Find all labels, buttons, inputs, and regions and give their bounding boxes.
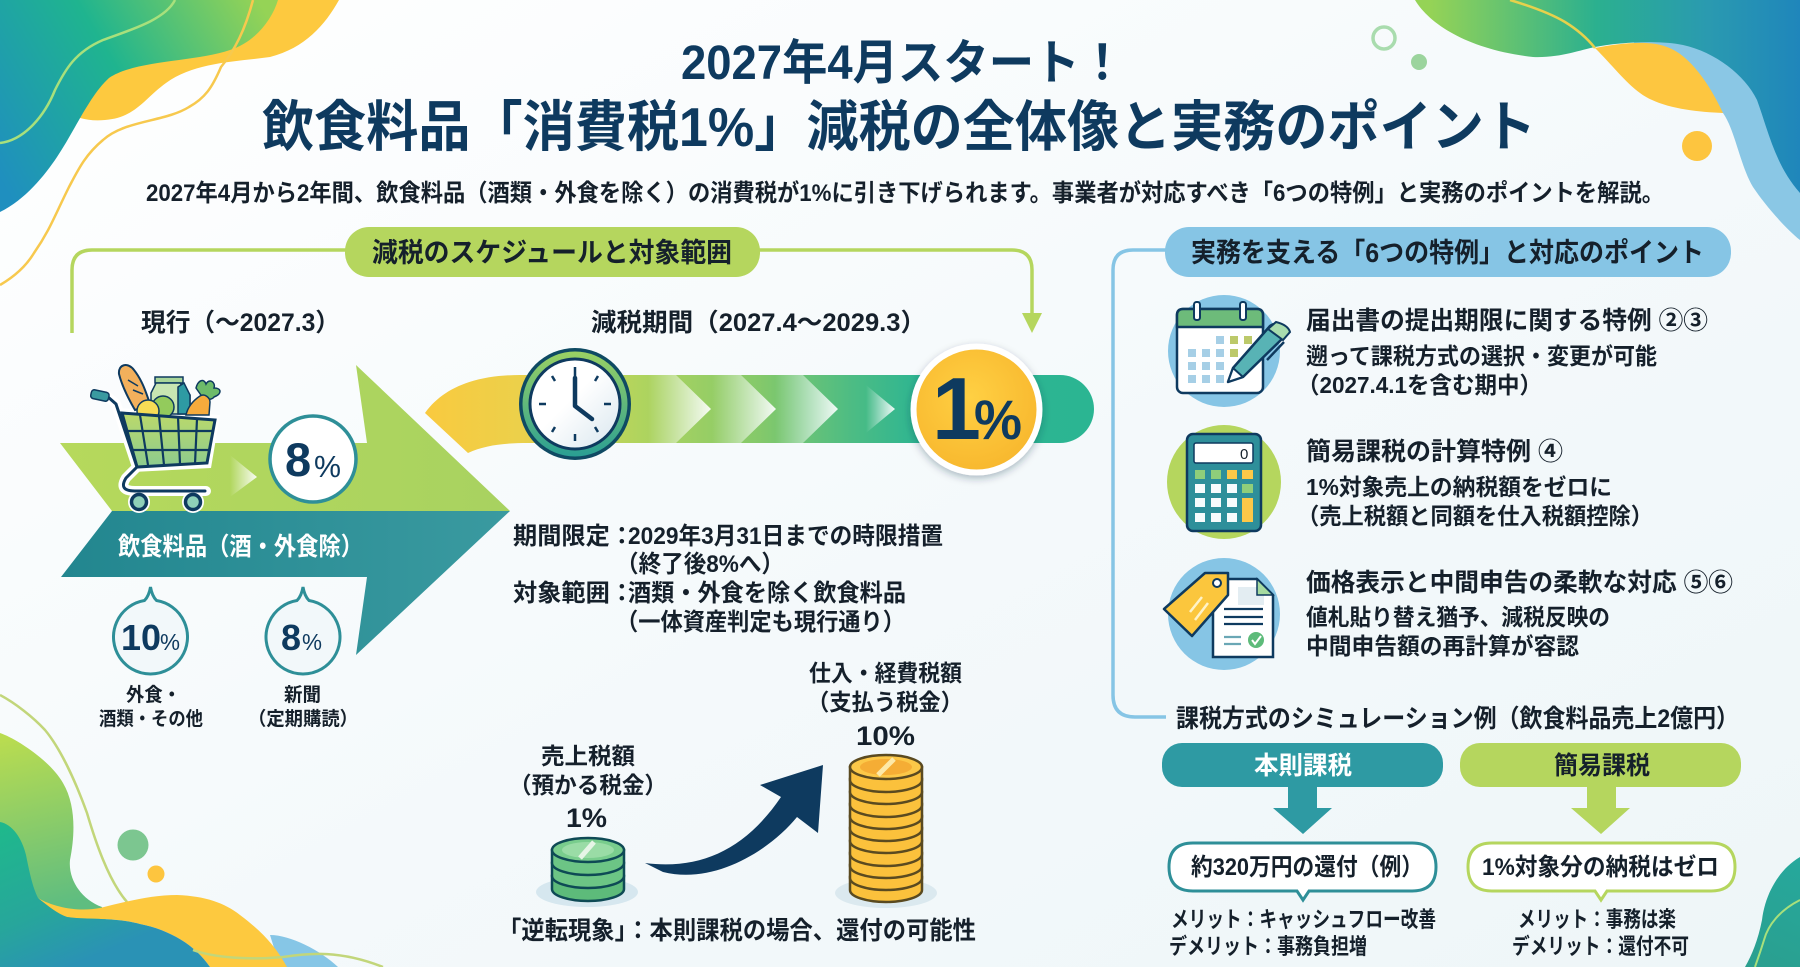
decoration: bottom-left blobs	[0, 695, 383, 967]
text: limited period and scope: 期間限定：	[513, 523, 634, 550]
label: sales tax	[509, 743, 667, 833]
label: dining out, alcohol, other	[99, 684, 203, 730]
icon: green coin stack	[536, 838, 638, 907]
text: simplified taxation: （売上税額と同額を仕入税額控除）	[1297, 503, 1653, 529]
column: standard taxation: デメリット：事務負担増	[1169, 934, 1367, 959]
badge: 8% newspapers	[266, 587, 340, 674]
small white chevron	[230, 455, 257, 497]
label: purchase tax: 仕入・経費税額	[809, 660, 962, 686]
column: standard taxation	[1162, 743, 1443, 959]
column: simplified taxation: 1%対象分の納税はゼロ	[1482, 853, 1719, 881]
decoration: top-right blobs	[1373, 0, 1800, 240]
icon: price tag and document	[1164, 558, 1280, 670]
big arrow	[60, 365, 510, 655]
icon: calendar and pen	[1168, 295, 1290, 407]
label: dining out, alcohol, other: 酒類・その他	[99, 708, 203, 730]
text: notification deadline: 遡って課税方式の選択・変更が可能	[1306, 343, 1657, 369]
caption: inversion phenomenon: 「逆転現象」：本則課税の場合、還付の可能性	[498, 917, 976, 945]
title	[262, 37, 1536, 158]
title: 飲食料品「消費税1%」減税の全体像と実務のポイント	[262, 96, 1536, 158]
column: standard taxation: 約320万円の還付（例）	[1191, 854, 1423, 881]
label: newspapers	[248, 684, 358, 730]
badge: 10%	[114, 587, 188, 674]
label: sales tax: （預かる税金）	[509, 772, 667, 798]
text: price display and interim return: 中間申告額の再計算が容認	[1306, 633, 1579, 659]
label: purchase tax: 10%	[856, 721, 915, 751]
badge: 1%: 1	[932, 359, 981, 458]
heading: six special measures	[1165, 227, 1731, 277]
badge: 8% current: 8	[285, 433, 311, 486]
title: 2027年4月スタート！	[681, 37, 1125, 90]
column: standard taxation: メリット：キャッシュフロー改善	[1171, 907, 1436, 932]
label: sales tax: 1%	[566, 803, 607, 833]
badge: 10%: %	[160, 629, 180, 655]
label: dining out, alcohol, other: 外食・	[126, 684, 181, 706]
icon: clock	[519, 348, 631, 460]
badge: 8% newspapers: %	[302, 629, 322, 655]
text: price display and interim return: 値札貼り替え猶予、減税反映の	[1306, 604, 1610, 630]
decoration: bottom-right blob	[1745, 857, 1800, 967]
label: purchase tax	[807, 660, 963, 751]
label: current period: 現行（〜2027.3）	[141, 309, 340, 337]
heading: schedule and scope: 減税のスケジュールと対象範囲	[372, 238, 732, 268]
text: simplified taxation	[1297, 438, 1653, 529]
label: newspapers: 新聞	[284, 684, 321, 706]
text: notification deadline: 届出書の提出期限に関する特例 ②③	[1306, 307, 1708, 335]
column: simplified taxation: メリット：事務は楽	[1518, 907, 1676, 932]
badge: 8% current	[270, 416, 356, 502]
text: limited period and scope: （終了後8%へ）	[616, 551, 784, 578]
text: price display and interim return: 価格表示と中間申告の柔軟な対応 ⑤⑥	[1306, 569, 1733, 597]
text: limited period and scope: 酒類・外食を除く飲食料品	[628, 580, 906, 607]
badge: 10%: 10	[121, 617, 161, 658]
label: food and beverages: 飲食料品（酒・外食除）	[118, 533, 363, 561]
label: sales tax: 売上税額	[541, 743, 635, 769]
subtitle: 2027年4月から2年間、飲食料品（酒類・外食を除く）の消費税が1%に引き下げられます。事業者が対応すべき「6つの特例」と実務のポイントを解説。	[146, 179, 1664, 207]
label: newspapers: （定期購読）	[248, 708, 358, 730]
label: purchase tax: （支払う税金）	[807, 689, 963, 715]
badge: 1%: %	[974, 388, 1022, 451]
icon: gold coin stack	[835, 755, 937, 908]
label: reduction period: 減税期間（2027.4〜2029.3）	[591, 309, 926, 337]
icon: calculator: 0	[1240, 446, 1248, 463]
badge: 8% newspapers: 8	[281, 617, 301, 658]
badge: 8% current: %	[314, 449, 341, 484]
text: notification deadline	[1297, 307, 1708, 398]
text: limited period and scope: 対象範囲：	[513, 580, 634, 607]
decoration: top-left blobs	[0, 0, 339, 285]
column: simplified taxation	[1460, 743, 1741, 959]
text: price display and interim return	[1306, 569, 1733, 659]
connector: schedule frame line with arrow	[72, 250, 1042, 333]
text: notification deadline: （2027.4.1を含む期中）	[1297, 372, 1542, 398]
column: simplified taxation: 簡易課税	[1554, 752, 1650, 780]
timeline ribbon	[425, 375, 1094, 453]
icon: shopping cart	[90, 365, 220, 513]
heading: simulation: 課税方式のシミュレーション例（飲食料品売上2億円）	[1176, 705, 1739, 733]
column: standard taxation: 本則課税	[1254, 752, 1352, 780]
text: simplified taxation: 1%対象売上の納税額をゼロに	[1306, 474, 1612, 500]
text: limited period and scope: 2029年3月31日までの時限措置	[628, 523, 943, 550]
text: limited period and scope: （一体資産判定も現行通り）	[616, 609, 905, 636]
heading: six special measures: 実務を支える「6つの特例」と対応のポイント	[1191, 238, 1704, 268]
connector: special measures frame line	[1113, 250, 1166, 717]
column: simplified taxation: デメリット：還付不可	[1512, 934, 1689, 959]
text: limited period and scope	[513, 523, 943, 636]
icon: calculator	[1167, 425, 1281, 539]
text: simplified taxation: 簡易課税の計算特例 ④	[1306, 438, 1563, 466]
heading: schedule and scope	[345, 227, 760, 277]
arrow: inversion	[645, 765, 823, 875]
badge: 1%	[910, 344, 1042, 476]
